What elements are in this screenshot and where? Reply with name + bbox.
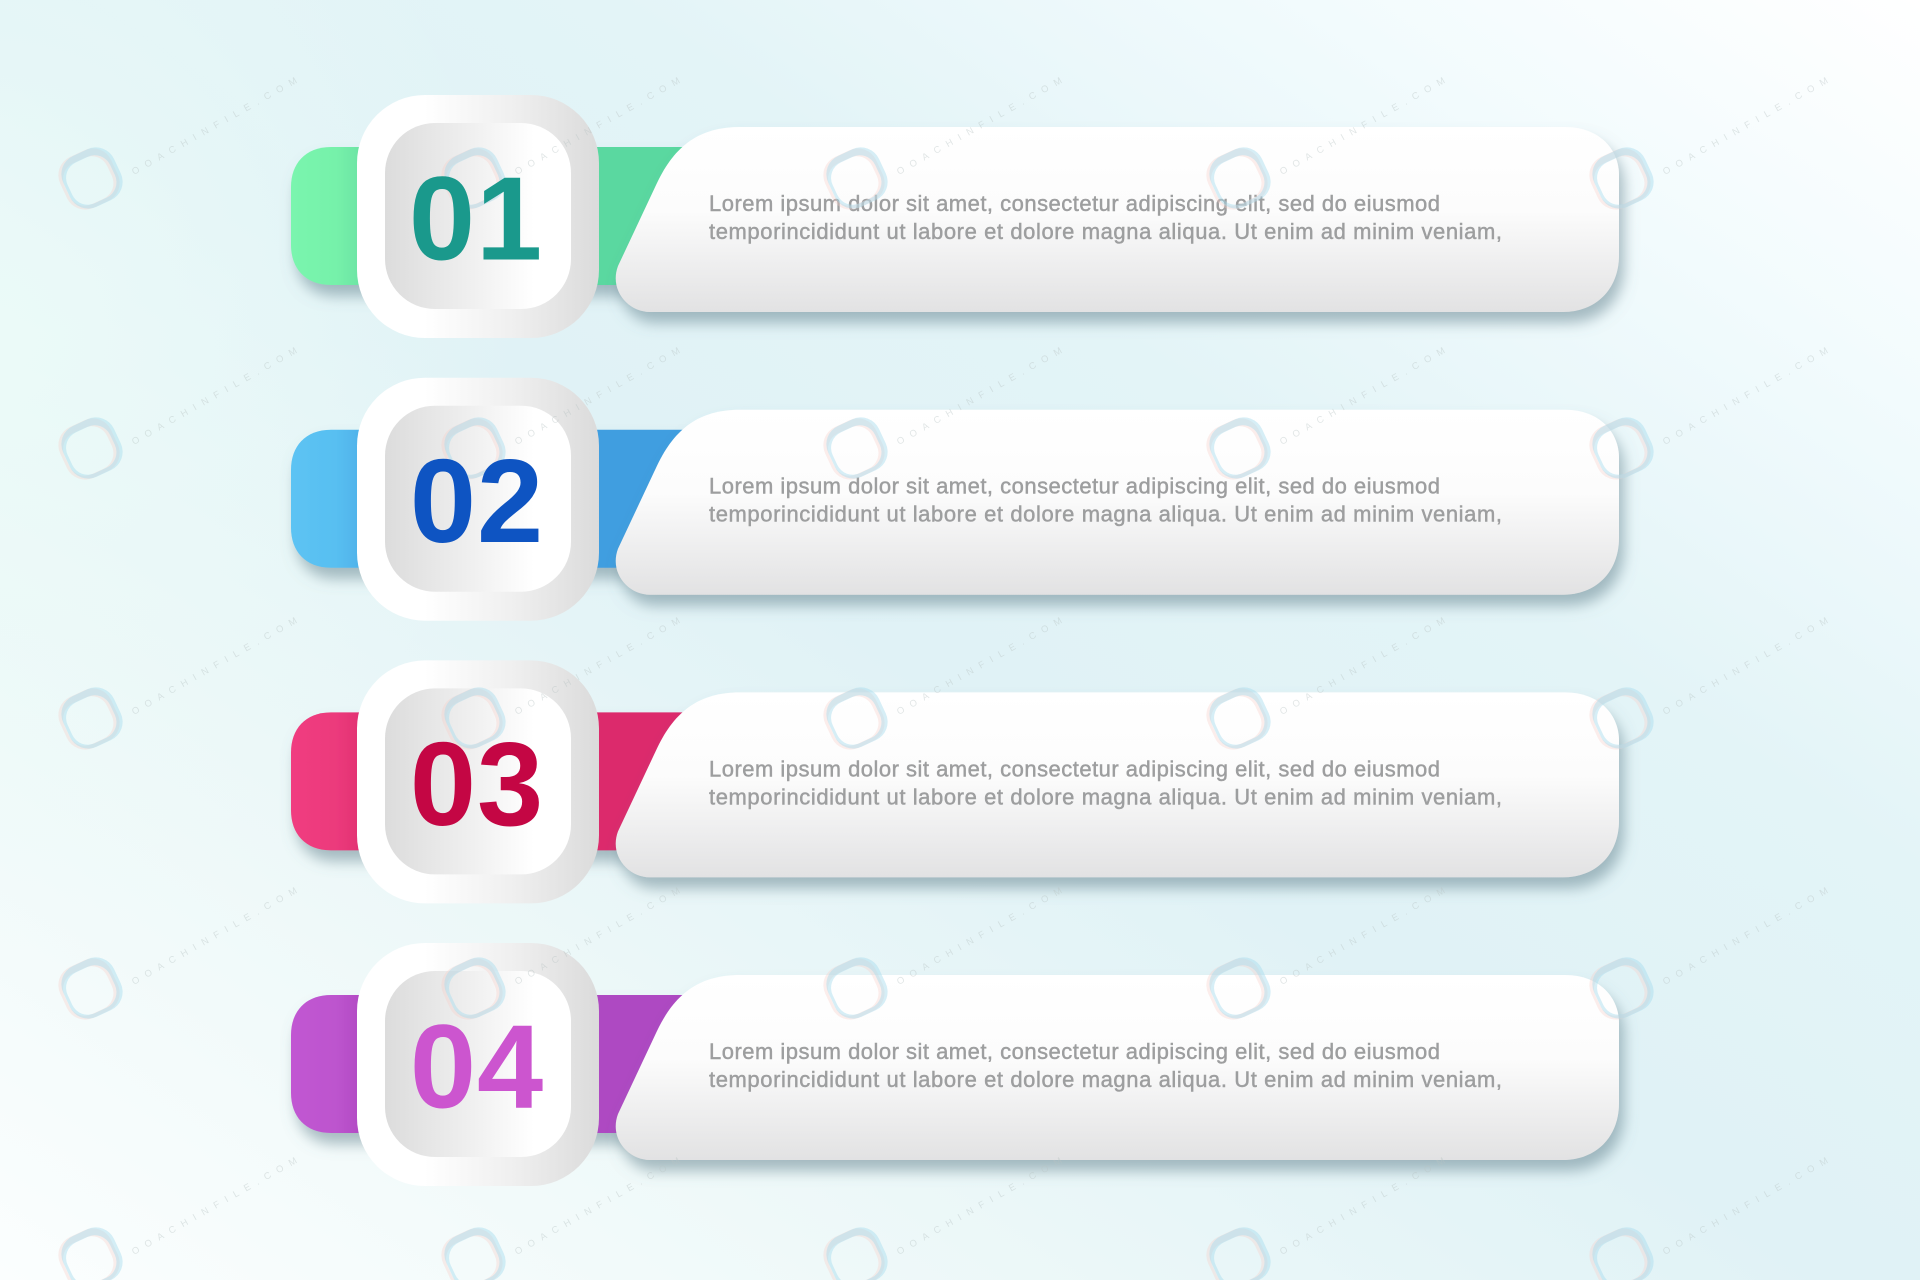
watermark grid: OOACHINFILE.COM xyxy=(895,345,1064,448)
text card 04 xyxy=(616,975,1619,1160)
number badge outer 01 xyxy=(357,95,599,338)
panel: item 02 xyxy=(291,378,1619,621)
watermark grid: OOACHINFILE.COM xyxy=(513,885,682,988)
colored tab 04 xyxy=(291,995,700,1133)
watermark grid: OOACHINFILE.COM xyxy=(130,75,299,178)
watermark grid: OOACHINFILE.COM xyxy=(1278,885,1447,988)
watermark grid: OOACHINFILE.COM xyxy=(1661,1155,1830,1258)
colored tab 02 xyxy=(291,430,700,568)
text card 02 xyxy=(616,410,1619,595)
description 01: Lorem ipsum dolor sit amet, consectetur adipiscing elit, sed do eiusmod xyxy=(709,191,1440,216)
watermark grid: OOACHINFILE.COM xyxy=(513,345,682,448)
colored tab 01 xyxy=(291,147,700,285)
watermark grid: OOACHINFILE.COM xyxy=(895,1155,1064,1258)
description 02: Lorem ipsum dolor sit amet, consectetur adipiscing elit, sed do eiusmod xyxy=(709,474,1440,499)
watermark grid: OOACHINFILE.COM xyxy=(1661,615,1830,718)
number badge inner 02 xyxy=(385,406,571,592)
panel: item 03 xyxy=(291,660,1619,903)
description 03: temporincididunt ut labore et dolore magna aliqua. Ut enim ad minim veniam, xyxy=(709,784,1502,809)
number 02: 02 xyxy=(410,435,544,568)
number 01: 01 xyxy=(409,152,543,286)
watermark grid: OOACHINFILE.COM xyxy=(130,885,299,988)
description 03: Lorem ipsum dolor sit amet, consectetur adipiscing elit, sed do eiusmod xyxy=(709,756,1440,781)
number 03: 03 xyxy=(410,718,544,851)
colored tab 03 xyxy=(291,712,700,850)
description 04: Lorem ipsum dolor sit amet, consectetur adipiscing elit, sed do eiusmod xyxy=(709,1039,1440,1064)
description 02: temporincididunt ut labore et dolore magna aliqua. Ut enim ad minim veniam, xyxy=(709,502,1502,527)
description 04: temporincididunt ut labore et dolore magna aliqua. Ut enim ad minim veniam, xyxy=(709,1067,1502,1092)
description 01: temporincididunt ut labore et dolore magna aliqua. Ut enim ad minim veniam, xyxy=(709,219,1502,244)
text card 01 xyxy=(616,127,1619,312)
number badge outer 02 xyxy=(357,378,599,621)
watermark grid: OOACHINFILE.COM xyxy=(130,1155,299,1258)
watermark grid: OOACHINFILE.COM xyxy=(513,1155,682,1258)
watermark grid: OOACHINFILE.COM xyxy=(895,75,1064,178)
number badge outer 03 xyxy=(357,660,599,903)
text card 03 xyxy=(616,692,1619,877)
panel: item 04 xyxy=(291,943,1619,1186)
watermark grid: OOACHINFILE.COM xyxy=(1278,615,1447,718)
watermark grid: OOACHINFILE.COM xyxy=(895,885,1064,988)
watermark grid: OOACHINFILE.COM xyxy=(1278,345,1447,448)
number 04: 04 xyxy=(410,1000,544,1134)
number badge inner 04 xyxy=(385,971,571,1157)
watermark grid: OOACHINFILE.COM xyxy=(1278,75,1447,178)
panel: item 01 xyxy=(291,95,1619,338)
watermark grid: OOACHINFILE.COM xyxy=(1661,75,1830,178)
watermark grid: OOACHINFILE.COM xyxy=(130,615,299,718)
watermark grid: OOACHINFILE.COM xyxy=(895,615,1064,718)
number badge outer 04 xyxy=(357,943,599,1186)
watermark grid: OOACHINFILE.COM xyxy=(513,615,682,718)
watermark grid: OOACHINFILE.COM xyxy=(130,345,299,448)
watermark grid: OOACHINFILE.COM xyxy=(513,75,682,178)
number badge inner 01 xyxy=(385,123,571,309)
number badge inner 03 xyxy=(385,688,571,874)
watermark grid: OOACHINFILE.COM xyxy=(1661,345,1830,448)
watermark grid: OOACHINFILE.COM xyxy=(1661,885,1830,988)
watermark grid: OOACHINFILE.COM xyxy=(1278,1155,1447,1258)
